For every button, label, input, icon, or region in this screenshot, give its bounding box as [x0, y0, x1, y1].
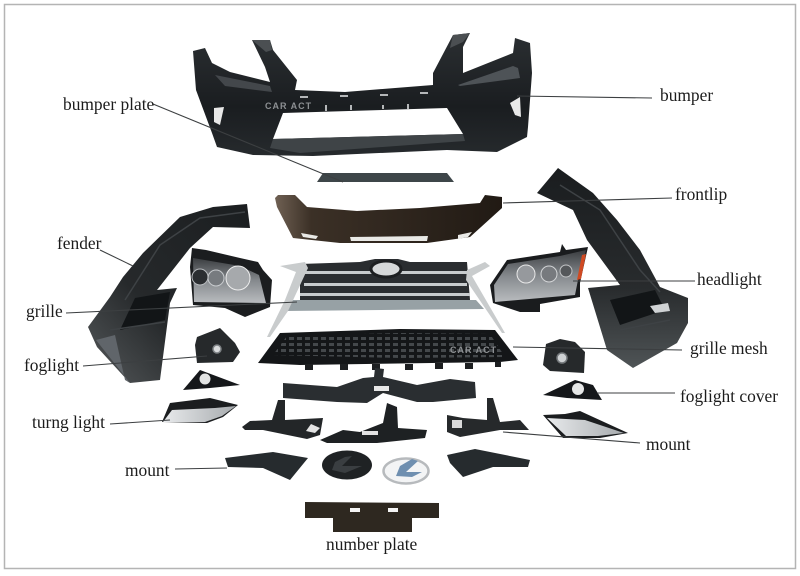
part: left headlight: [190, 248, 272, 317]
part: bumper: [193, 33, 532, 156]
part: left mount bracket: [242, 400, 323, 439]
part: grille: [267, 259, 505, 337]
part: left foglight: [195, 328, 240, 363]
part: black emblem: [322, 450, 372, 480]
leader lines: [66, 96, 695, 469]
part: left fender: [88, 204, 250, 383]
part: number plate: [305, 502, 439, 532]
part: front lip: [275, 195, 502, 243]
label: foglight: foglight: [24, 355, 79, 375]
part: right headlight: [490, 244, 588, 312]
part: lower right mount: [447, 449, 530, 477]
part: centre mount bracket: [320, 403, 427, 443]
watermark: CAR ACT: [265, 101, 312, 111]
part: left foglight cover: [183, 370, 240, 390]
label: right mount: mount: [646, 434, 691, 454]
label: fender: fender: [57, 233, 102, 253]
label: grille: grille: [26, 301, 63, 321]
label: grille mesh: grille mesh: [690, 338, 768, 358]
part: right turn light: [543, 411, 628, 438]
part: grille mesh: [258, 329, 518, 370]
part: centre support bar: [283, 368, 476, 403]
part: left turn light: [162, 398, 238, 423]
label: frontlip: frontlip: [675, 184, 727, 204]
part: chrome emblem: [384, 458, 428, 484]
label: number plate: number plate: [326, 534, 418, 554]
watermark: CAR ACT: [450, 345, 497, 355]
label: turn light: turng light: [32, 412, 105, 432]
label: bumper plate: bumper plate: [63, 94, 155, 114]
part: lower left mount: [225, 452, 308, 480]
part: right mount bracket: [447, 398, 529, 437]
part: right foglight: [543, 339, 585, 373]
part: right foglight cover: [543, 380, 602, 400]
part: bumper plate: [317, 173, 454, 182]
label: foglight cover: foglight cover: [680, 386, 778, 406]
part: right fender: [537, 168, 688, 368]
label: headlight: headlight: [697, 269, 762, 289]
label: bumper: bumper: [660, 85, 713, 105]
label: left mount: mount: [125, 460, 170, 480]
